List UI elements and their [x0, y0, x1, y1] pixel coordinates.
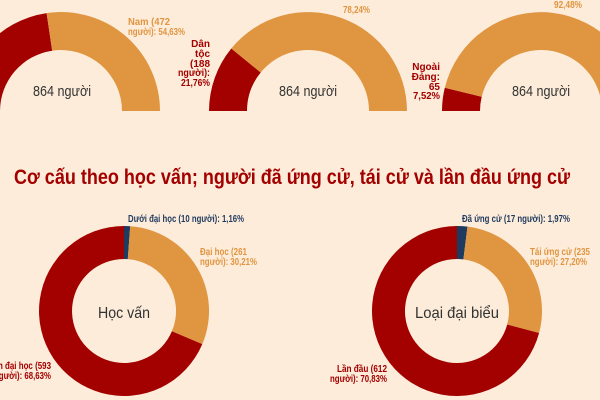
- label: ran before: Đã ứng cử (17 người): 1,97%: [462, 214, 570, 225]
- chart: education donut: [0, 214, 257, 396]
- label: ethnic minority: người):: [178, 68, 210, 79]
- label: center: 864 người: [512, 83, 570, 100]
- label: center: Loại đại biểu: [415, 304, 499, 322]
- label: ethnic minority: (188: [190, 59, 210, 70]
- label: center: 864 người: [279, 83, 337, 100]
- label: non-party: 7,52%: [413, 91, 440, 102]
- chart: delegate type donut: [330, 214, 590, 396]
- label: university: người): 30,21%: [200, 257, 257, 268]
- label: male: người): 54,63%: [128, 27, 185, 38]
- label: non-party: Ngoài: [412, 62, 440, 73]
- label: center: Học vấn: [98, 305, 150, 322]
- label: party: 92,48%: [554, 0, 582, 11]
- label: non-party: 65: [429, 82, 440, 93]
- label: non-party: Đảng:: [412, 72, 440, 83]
- chart: party half donut: [412, 0, 600, 111]
- label: below university: Dưới đại học (10 người): 1,16%: [128, 214, 244, 225]
- label: ethnic minority: Dân: [191, 39, 210, 50]
- label: center: 864 người: [33, 83, 91, 100]
- chart: ethnic half donut: [178, 5, 407, 111]
- chart: gender half donut: [0, 12, 185, 111]
- label: first time: Lần đầu (612: [337, 363, 387, 375]
- label: ethnic minority: tộc: [195, 49, 210, 60]
- label: male: Nam (472: [128, 17, 170, 28]
- label: university: Đại học (261: [200, 247, 247, 258]
- label: first time: người): 70,83%: [330, 374, 387, 385]
- label: majority: 78,24%: [343, 5, 370, 16]
- label: ethnic minority: 21,76%: [181, 78, 210, 89]
